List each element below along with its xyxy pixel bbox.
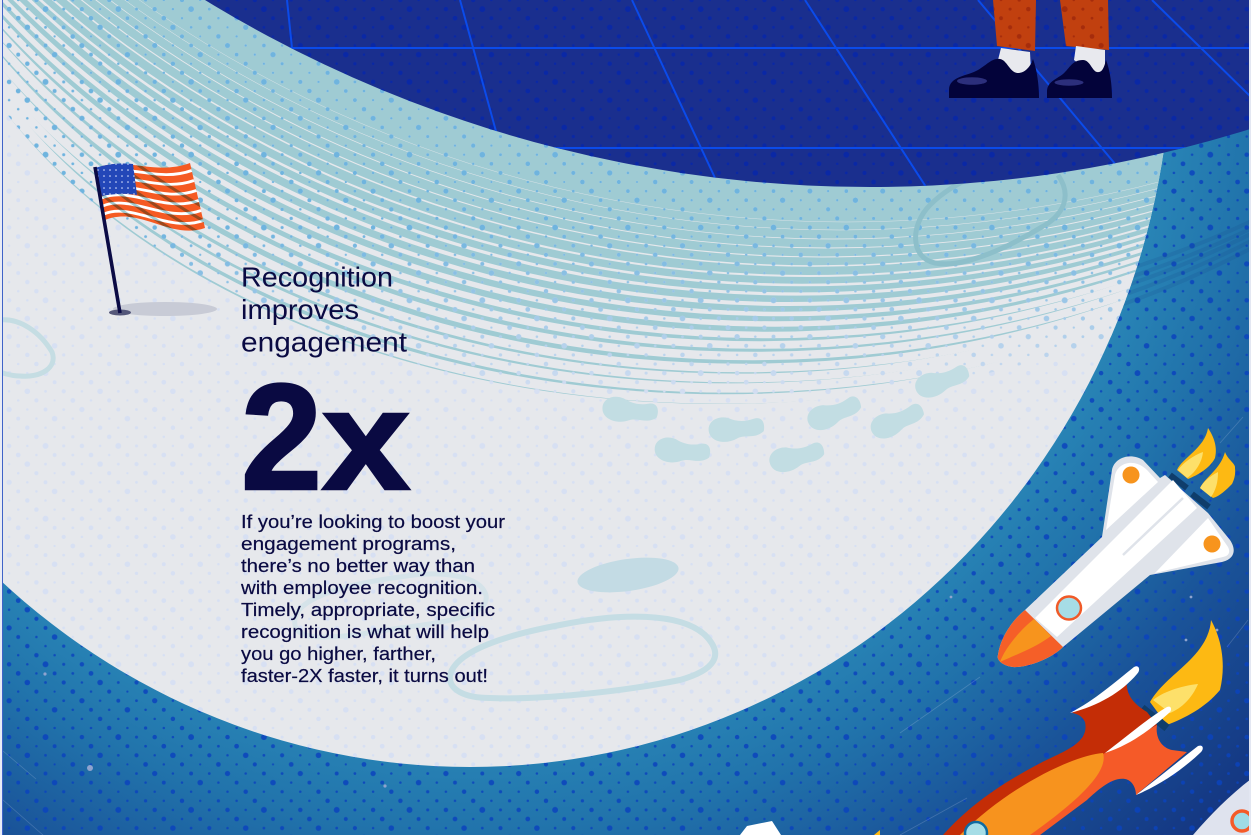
rocket white fins bbox=[1070, 666, 1139, 713]
trousers bbox=[993, 0, 1036, 51]
crater: filled ellipse bbox=[578, 558, 678, 592]
canton with stars bbox=[95, 163, 137, 196]
body text: If you’re looking to boost your bbox=[241, 511, 505, 532]
big number: 2x: 2 bbox=[241, 352, 322, 521]
astronaut legs and shoes bbox=[949, 0, 1112, 98]
body text: with employee recognition. bbox=[240, 577, 483, 598]
crater: large outline bbox=[450, 617, 715, 698]
heading: Recognition improves engagement: engagement bbox=[241, 326, 407, 358]
flag pole bbox=[95, 167, 120, 313]
rocket dark body bbox=[943, 680, 1157, 835]
body text bbox=[240, 511, 505, 686]
rocket flame bbox=[1150, 620, 1223, 725]
shuttle flames bbox=[1177, 428, 1216, 479]
flag stripes shadow bbox=[101, 165, 204, 230]
crater: behind text bbox=[295, 574, 486, 637]
flag cloth bbox=[97, 163, 205, 231]
rocket window bbox=[965, 822, 987, 835]
rocket light body bbox=[1000, 725, 1187, 835]
shuttle wing lights bbox=[1122, 466, 1140, 484]
shuttle engines bbox=[1170, 475, 1187, 488]
body text: Timely, appropriate, specific bbox=[241, 599, 495, 620]
body text: you go higher, farther, bbox=[241, 643, 436, 664]
body text: recognition is what will help bbox=[241, 621, 489, 642]
body text: faster-2X faster, it turns out! bbox=[241, 665, 488, 686]
rocket belly bbox=[960, 753, 1104, 835]
shuttle white panels bbox=[1106, 463, 1158, 530]
body text: there’s no better way than bbox=[241, 555, 475, 576]
heading: Recognition improves engagement bbox=[241, 262, 407, 358]
cropped craft: white tip at bottom bbox=[740, 821, 781, 835]
shuttle nose bbox=[998, 610, 1063, 667]
heading: Recognition improves engagement: Recognition bbox=[241, 262, 393, 292]
heading: Recognition improves engagement: improves bbox=[241, 294, 359, 325]
body text: engagement programs, bbox=[241, 533, 456, 554]
crater: upper right bbox=[916, 175, 1065, 264]
planet surface with grid bbox=[205, 0, 1249, 187]
shuttle hull bbox=[998, 456, 1234, 667]
shoe highlights bbox=[957, 77, 987, 85]
rocket engine bbox=[1142, 708, 1167, 728]
flag shadow bbox=[113, 302, 217, 316]
icon: red rocket bbox=[943, 620, 1223, 835]
shuttle window bbox=[1057, 596, 1081, 620]
cropped flame tip at bottom bbox=[874, 830, 880, 835]
shoes bbox=[949, 59, 1039, 98]
big number: 2x bbox=[241, 352, 410, 521]
icon: American flag bbox=[93, 163, 217, 316]
cropped craft: lower right corner bbox=[1193, 779, 1251, 835]
footprints bbox=[601, 361, 973, 475]
icon: white space shuttle bbox=[998, 428, 1235, 667]
shadow band with concentric stripes bbox=[0, 0, 1251, 404]
stars and light streaks bbox=[3, 417, 1248, 835]
socks bbox=[998, 48, 1031, 74]
big number: 2x: x bbox=[322, 361, 410, 520]
crater: left edge bbox=[0, 320, 53, 376]
